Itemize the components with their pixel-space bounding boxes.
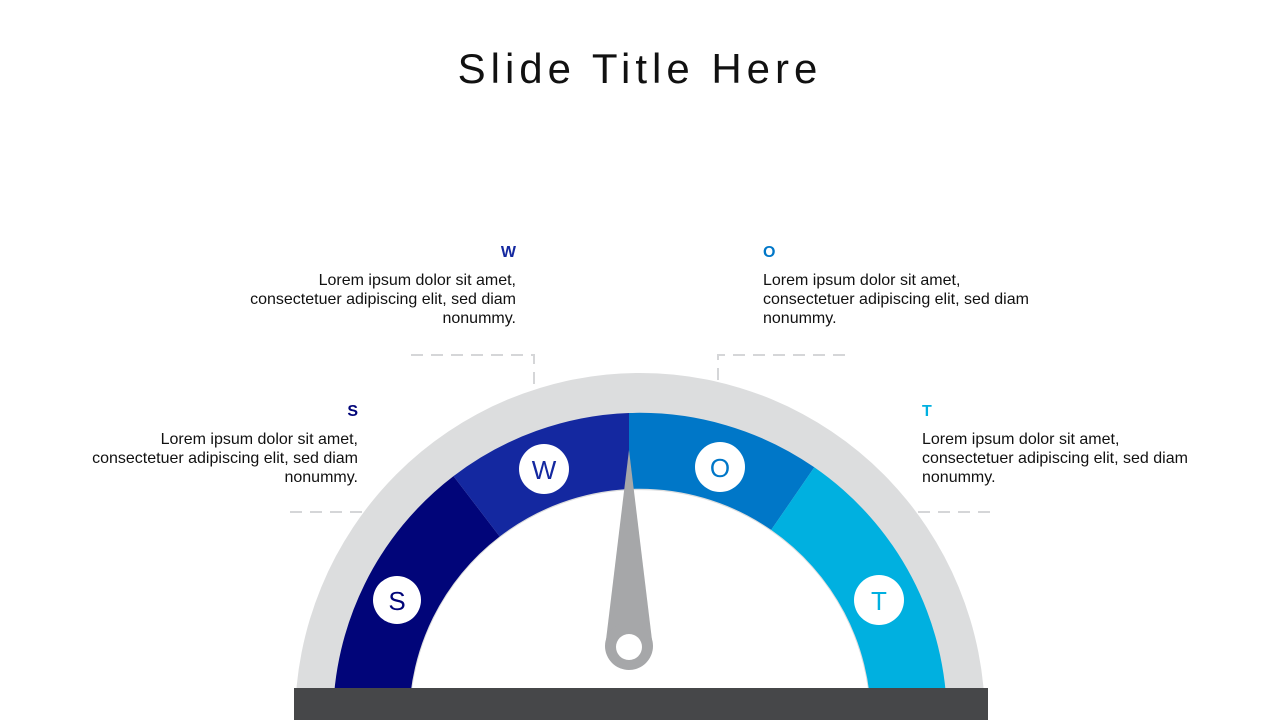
text: O (763, 244, 1029, 327)
circle W: W (532, 455, 557, 485)
gauge outer ring (295, 373, 985, 720)
circle O: O (710, 453, 730, 483)
segment W (454, 413, 629, 536)
text: O: nonummy. (763, 310, 837, 327)
circle S: S (388, 586, 406, 616)
text: O: O (763, 244, 775, 261)
text: W: W (501, 244, 516, 261)
text: S: Lorem ipsum dolor sit amet, (161, 431, 358, 448)
circle T: T (871, 586, 887, 616)
circle W (519, 444, 569, 494)
text: T (922, 403, 1188, 486)
text: W: nonummy. (442, 310, 516, 327)
text: O: consectetuer adipiscing elit, sed diam (763, 291, 1029, 308)
text: W (250, 244, 516, 327)
gauge inner face (410, 490, 870, 720)
title: Slide Title Here (458, 45, 822, 92)
segment S (333, 476, 500, 720)
base bar (294, 688, 988, 720)
text: S: consectetuer adipiscing elit, sed diam (92, 450, 358, 467)
text: T: nonummy. (922, 469, 996, 486)
circle O (695, 442, 745, 492)
circle T (854, 575, 904, 625)
text: T: consectetuer adipiscing elit, sed diam (922, 450, 1188, 467)
text: S: S (347, 403, 358, 420)
text: S (92, 403, 358, 486)
text: S: nonummy. (284, 469, 358, 486)
text: T: T (922, 403, 932, 420)
segment O (629, 413, 814, 530)
text: W: consectetuer adipiscing elit, sed diam (250, 291, 516, 308)
text: O: Lorem ipsum dolor sit amet, (763, 272, 960, 289)
segment T (771, 467, 947, 720)
circle S (373, 576, 421, 624)
text: W: Lorem ipsum dolor sit amet, (319, 272, 516, 289)
needle (605, 450, 653, 670)
text: T: Lorem ipsum dolor sit amet, (922, 431, 1119, 448)
